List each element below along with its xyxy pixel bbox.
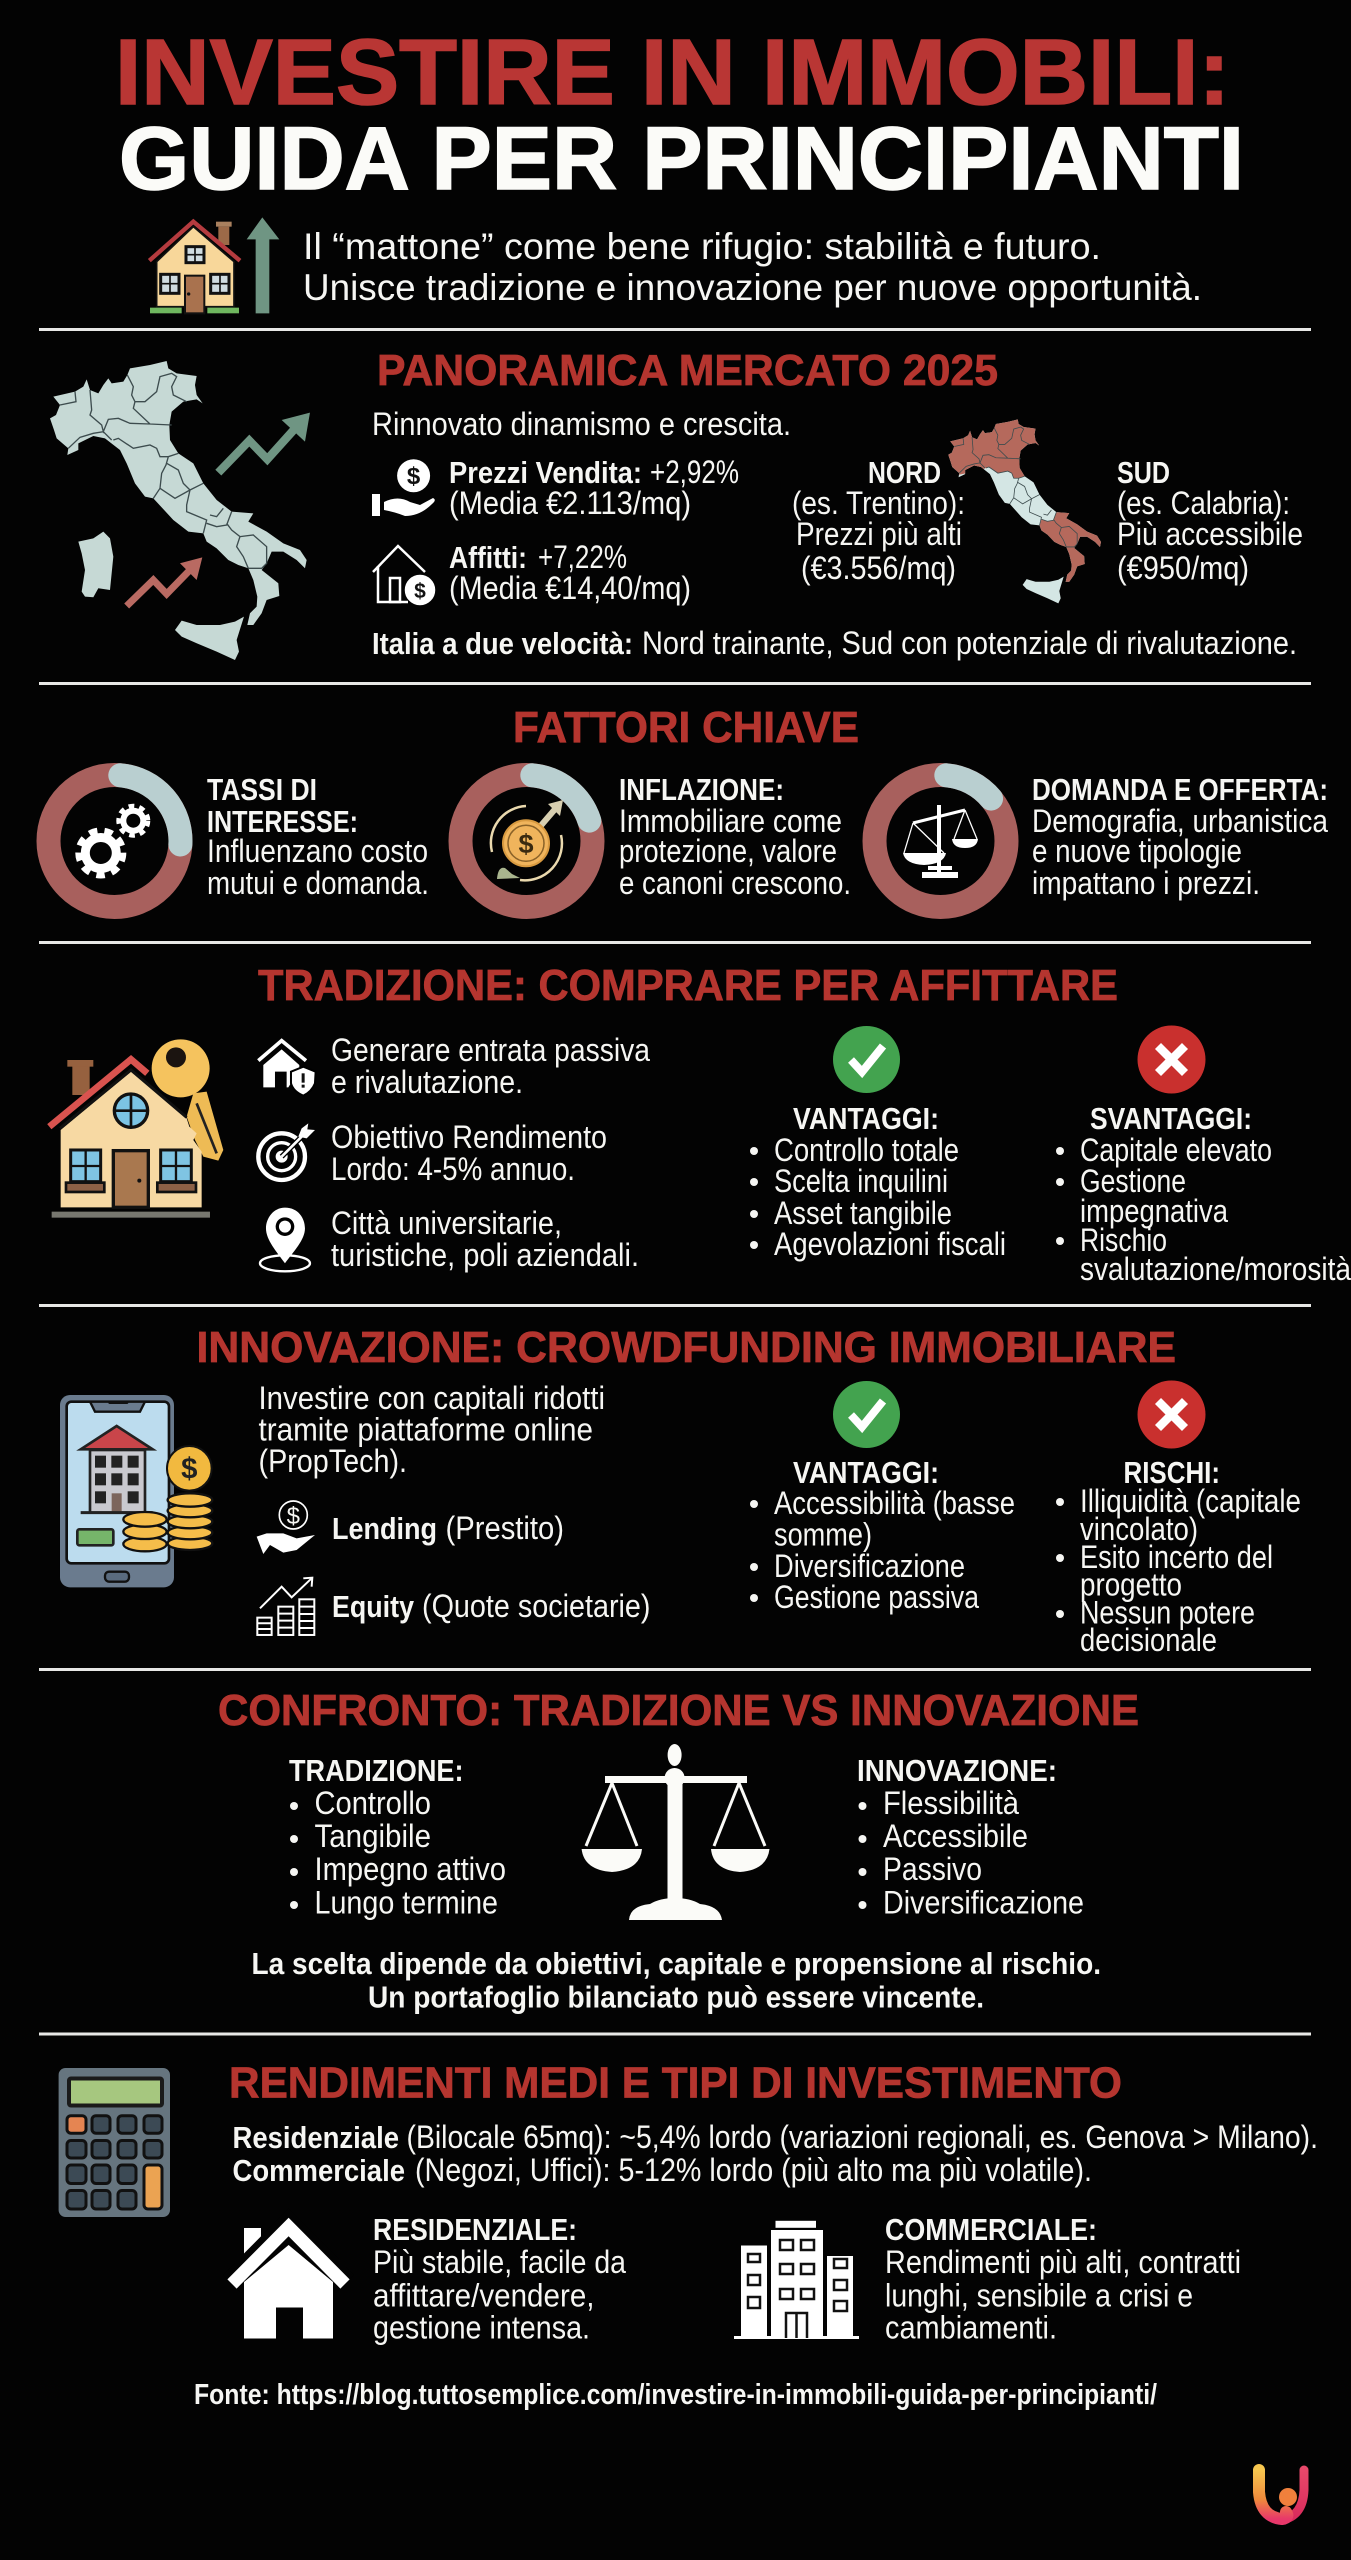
text: residenziale: RESIDENZIALE: [373, 2212, 577, 2247]
text: prezzi vendita: +2,92% [650, 454, 739, 490]
text: e canoni crescono. [619, 865, 851, 901]
list: svantaggi: SVANTAGGI: [1090, 1101, 1252, 1136]
intro text: Unisce tradizione e innovazione per nuove opportunità. [303, 267, 1202, 308]
icon: lending hand: $ [287, 1503, 300, 1530]
heading: RENDIMENTI MEDI E TIPI DI INVESTIMENTO [229, 2060, 1122, 2108]
text: rendimento: Obiettivo Rendimento [331, 1119, 607, 1155]
text [619, 772, 851, 901]
icon: equity chart [257, 1578, 314, 1635]
icon: map pin [260, 1208, 310, 1271]
icon: cross [1138, 1380, 1206, 1448]
text: citta [331, 1205, 639, 1273]
list: vantaggi: VANTAGGI: [793, 1455, 939, 1490]
list: vantaggi [750, 1101, 1006, 1262]
text: commerciale: Rendimenti più alti, contratti [885, 2244, 1241, 2280]
text: affitti: Affitti: [449, 540, 527, 575]
text: residenziale: Più stabile, facile da [373, 2244, 626, 2280]
conclusion text: Un portafoglio bilanciato può essere vincente. [368, 1980, 984, 2014]
list: vantaggi [750, 1455, 1015, 1615]
icon: map of Italy with trend arrows [50, 361, 310, 660]
icon: phone with building and coins [60, 1395, 212, 1587]
factor: domanda e offerta [874, 772, 1328, 907]
text: sud: Più accessibile [1117, 516, 1303, 552]
text: protezione, valore [619, 833, 837, 869]
list: rischi: decisionale [1080, 1622, 1217, 1658]
panel: fattori chiave [48, 704, 1328, 907]
text: impattano i prezzi. [1032, 865, 1260, 901]
icon: hand with coin: $ [407, 463, 421, 490]
text: affitti: +7,22% [538, 539, 627, 575]
list: vantaggi: somme) [774, 1516, 872, 1552]
text: prezzi vendita: Prezzi Vendita: [449, 455, 642, 490]
source line: Fonte: https://blog.tuttosemplice.com/investire-in-immobili-guida-per-principianti/ [194, 2379, 1157, 2411]
text: lending: (Prestito) [446, 1510, 564, 1546]
ring with coin [460, 775, 592, 907]
heading: TRADIZIONE: COMPRARE PER AFFITTARE [258, 962, 1118, 1010]
list: svantaggi: Rischio [1080, 1222, 1167, 1258]
panel: innovazione [60, 1324, 1301, 1658]
text: prezzi vendita [449, 454, 739, 521]
conclusion text: La scelta dipende da obiettivi, capitale e propensione al rischio. [252, 1946, 1101, 1981]
text: entrata passiva [331, 1032, 650, 1100]
list: vantaggi: Controllo totale [774, 1132, 959, 1168]
factor: inflazione [460, 772, 851, 907]
icon: house with key [49, 1039, 223, 1218]
text [207, 772, 429, 901]
ring with gears [48, 775, 180, 907]
icon: lending hand [257, 1501, 315, 1554]
text: nord: (es. Trentino): [792, 485, 965, 521]
list: vantaggi: Gestione passiva [774, 1579, 979, 1615]
text: lending: Lending [332, 1511, 437, 1546]
icon: cross [1138, 1026, 1206, 1094]
icon: check [833, 1026, 900, 1093]
text: nord: (€3.556/mq) [801, 550, 956, 586]
text: commerciale yield: (Negozi, Uffici): 5-12% lordo (più alto ma più volatile). [415, 2152, 1092, 2188]
title line 2: GUIDA PER PRINCIPIANTI [119, 108, 1244, 208]
list: rischi: Illiquidità (capitale [1080, 1483, 1301, 1519]
ring with scales [874, 775, 1006, 907]
text: equity: Equity [332, 1589, 415, 1624]
title line 1: INVESTIRE IN IMMOBILI: [115, 20, 1230, 124]
text: Influenzano costo [207, 833, 428, 869]
list: svantaggi: impegnativa [1080, 1193, 1228, 1229]
text: intro: Investire con capitali ridotti [258, 1380, 605, 1416]
list: vantaggi: Scelta inquilini [774, 1163, 948, 1199]
text: citta: Città universitarie, [331, 1205, 562, 1241]
list: rischi: Nessun potere [1080, 1594, 1255, 1630]
text: Immobiliare come [619, 803, 842, 839]
list: rischi: Esito incerto del [1080, 1539, 1273, 1575]
text: sud: (es. Calabria): [1117, 485, 1290, 521]
heading: FATTORI CHIAVE [513, 704, 859, 752]
chart: north south map [948, 419, 1101, 603]
list: innovazione: Diversificazione [883, 1884, 1084, 1920]
list: rischi: progetto [1080, 1566, 1182, 1602]
icon: logo [1259, 2470, 1304, 2520]
text: TASSI DI [207, 772, 317, 807]
text: residenziale: gestione intensa. [373, 2310, 590, 2346]
text [1032, 772, 1328, 901]
icon: white house [232, 2227, 345, 2338]
panel: rendimenti [59, 2060, 1318, 2346]
text: citta: turistiche, poli aziendali. [331, 1237, 639, 1273]
text: residenziale: affittare/vendere, [373, 2278, 594, 2314]
conclusion text [252, 1946, 1101, 2014]
heading: PANORAMICA MERCATO 2025 [377, 347, 998, 395]
text: prezzi vendita: (Media €2.113/mq) [449, 485, 691, 521]
list: rischi [1056, 1455, 1301, 1658]
list: vantaggi: Agevolazioni fiscali [774, 1226, 1006, 1262]
text: INFLAZIONE: [619, 772, 784, 807]
text: sud: SUD [1117, 455, 1170, 490]
icon: house with coin: $ [414, 580, 426, 603]
text: sud: (€950/mq) [1117, 550, 1249, 586]
list: vantaggi: Accessibilità (basse [774, 1485, 1015, 1521]
list: innovazione: Passivo [883, 1851, 982, 1887]
heading: INNOVAZIONE: CROWDFUNDING IMMOBILIARE [196, 1324, 1176, 1372]
text: intro [258, 1380, 605, 1479]
icon: office building [734, 2221, 859, 2339]
list: vantaggi: Diversificazione [774, 1548, 965, 1584]
panel: tradizione [49, 962, 1351, 1287]
text: due velocita: Italia a due velocità: [372, 626, 633, 661]
list: tradizione: Tangibile [314, 1818, 431, 1854]
text: commerciale yield: Commerciale [232, 2153, 405, 2188]
text: commerciale: COMMERCIALE: [885, 2212, 1097, 2247]
text: nord: NORD [868, 455, 941, 490]
text: mutui e domanda. [207, 865, 429, 901]
text: entrata passiva: e rivalutazione. [331, 1064, 523, 1100]
text: equity [332, 1588, 650, 1624]
text: commerciale: cambiamenti. [885, 2310, 1057, 2346]
factor: tassi di interesse [48, 772, 429, 907]
text: equity: (Quote societarie) [422, 1588, 650, 1624]
text: affitti [449, 539, 691, 606]
icon: phone with building and coins: $ [181, 1453, 197, 1486]
text: intro: tramite piattaforme online [258, 1412, 593, 1448]
list: svantaggi [1056, 1101, 1351, 1287]
text: commerciale: lunghi, sensibile a crisi e [885, 2278, 1193, 2314]
icon: house with shield [258, 1041, 316, 1096]
text: rendimento [331, 1119, 607, 1187]
heading: CONFRONTO: TRADIZIONE VS INNOVAZIONE [218, 1687, 1139, 1735]
text: nord: Prezzi più alti [796, 516, 962, 552]
list: vantaggi: Asset tangibile [774, 1195, 952, 1231]
icon: target [258, 1123, 315, 1180]
text: residenziale [373, 2212, 626, 2346]
text: lending [332, 1510, 564, 1546]
text: sud [1117, 455, 1303, 586]
text: e nuove tipologie [1032, 833, 1242, 869]
list: innovazione: Accessibile [883, 1818, 1028, 1854]
text: due velocita [372, 625, 1297, 661]
list: vantaggi: VANTAGGI: [793, 1101, 939, 1136]
panel: confronto [218, 1687, 1139, 2014]
list: tradizione: Controllo [314, 1785, 431, 1821]
list: tradizione: TRADIZIONE: [289, 1753, 464, 1788]
list: svantaggi: Capitale elevato [1080, 1132, 1272, 1168]
icon: check [833, 1381, 900, 1448]
text: due velocita: Nord trainante, Sud con potenziale di rivalutazione. [642, 625, 1297, 661]
list: innovazione: INNOVAZIONE: [857, 1753, 1057, 1788]
list: innovazione: Flessibilità [883, 1785, 1019, 1821]
text: intro: Rinnovato dinamismo e crescita. [372, 406, 791, 442]
list: svantaggi: Gestione [1080, 1163, 1186, 1199]
text: residenziale yield: Residenziale [232, 2120, 399, 2155]
text: intro: (PropTech). [258, 1443, 407, 1479]
text: INTERESSE: [207, 804, 358, 839]
list: rischi: vincolato) [1080, 1511, 1198, 1547]
icon: calculator [59, 2068, 170, 2217]
list: innovazione [857, 1753, 1084, 1920]
ring with coin: $ [518, 829, 534, 859]
panel: header [115, 20, 1244, 313]
intro text [303, 226, 1202, 308]
list: tradizione: Impegno attivo [314, 1851, 506, 1887]
list: tradizione [289, 1753, 506, 1920]
icon: large scales [582, 1744, 770, 1920]
text: affitti: (Media €14,40/mq) [449, 570, 691, 606]
icon: house with up arrow [149, 217, 279, 313]
icon: hand with coin [372, 459, 435, 516]
text: entrata passiva: Generare entrata passiva [331, 1032, 650, 1068]
intro text: Il “mattone” come bene rifugio: stabilità e futuro. [303, 226, 1101, 267]
panel: panoramica mercato [50, 347, 1303, 661]
icon: house with coin [373, 546, 434, 604]
text: commerciale [885, 2212, 1241, 2346]
text: nord [792, 455, 965, 586]
list: rischi: RISCHI: [1124, 1455, 1220, 1490]
list: tradizione: Lungo termine [314, 1884, 498, 1920]
text: rendimento: Lordo: 4-5% annuo. [331, 1151, 575, 1187]
